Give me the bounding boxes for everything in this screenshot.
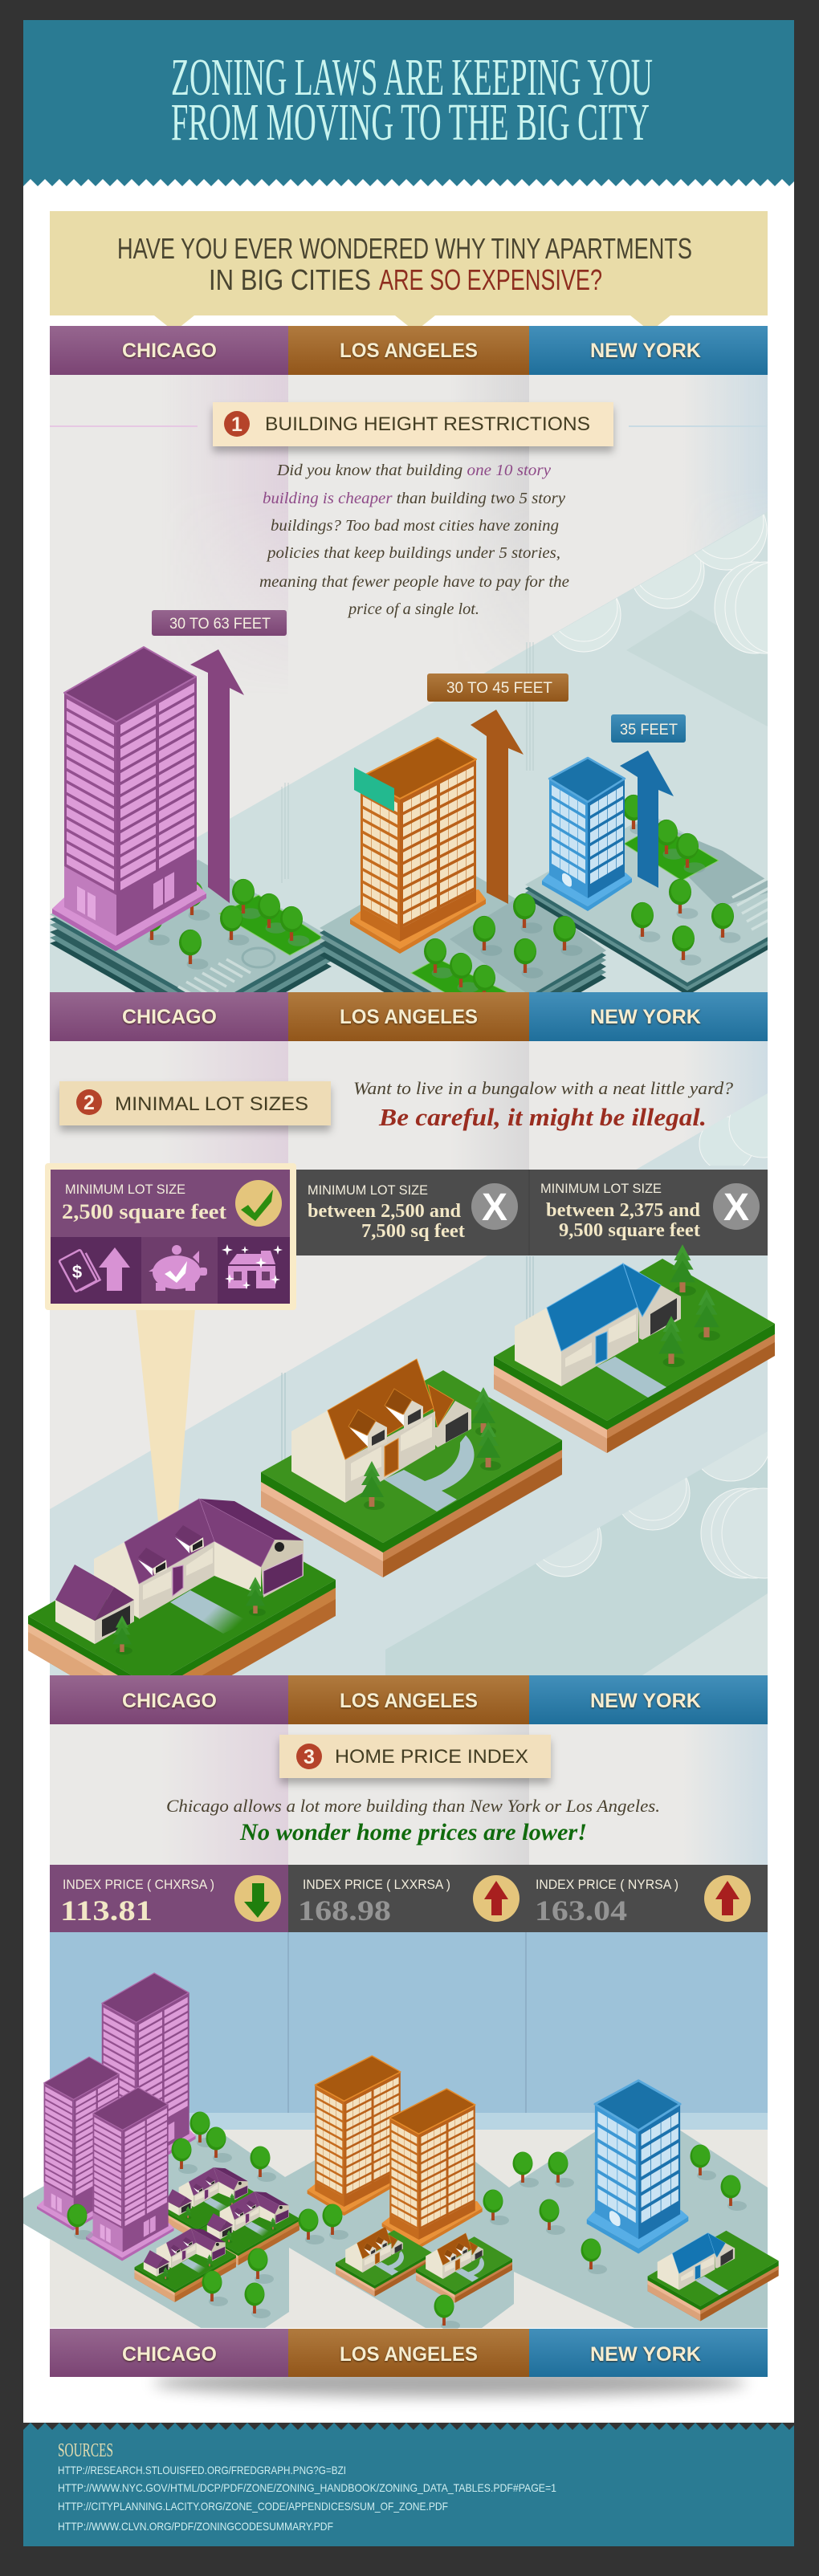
intro paragraph [259,462,569,618]
building: New York tower [542,758,632,911]
icon: NY cross [713,1183,760,1230]
arrow: New York height [620,751,674,888]
tab row 3: NEW YORK [590,1690,701,1712]
index bar [50,1865,768,1932]
intro text: Be careful, it might be illegal. [378,1103,707,1131]
intro paragraph: policies that keep buildings under 5 stories, [266,544,560,562]
tab row 1: NEW YORK [590,340,701,362]
section heading [59,1081,331,1125]
text: NY lot size: MINIMUM LOT SIZE [540,1181,662,1196]
buildings and houses: Chicago [37,1973,299,2318]
pill: New York height [611,714,686,743]
tab row 4: CHICAGO [122,2343,217,2366]
intro paragraph: building is cheaper than building two 5 story [263,490,565,507]
section heading: HOME PRICE INDEX [335,1746,528,1768]
lot: Los Angeles [320,877,606,992]
trees: Los Angeles [424,893,583,992]
tab row 4 [50,2329,768,2377]
header banner [23,20,794,186]
house: Chicago [28,1499,336,1722]
arrow: Los Angeles height [471,710,524,904]
text: LA lot size: 7,500 sq feet [361,1221,465,1242]
tab row 2 [50,992,768,1041]
intro text [166,1796,660,1846]
arrow: Chicago height [190,649,244,903]
intro text [353,1078,733,1131]
pill: New York height: 35 FEET [620,722,678,739]
sources footer [23,2423,794,2546]
icon: sparkling house [222,1244,283,1289]
background diagonal [50,1041,805,1675]
background tints [161,1724,768,1865]
bottom shadow [153,2368,747,2397]
text: LA lot size [308,1182,465,1242]
intro text: Chicago allows a lot more building than New York or Los Angeles. [166,1796,660,1816]
question text: IN BIG CITIES [209,263,371,296]
building: Los Angeles tower [350,738,486,954]
intro paragraph: meaning that fewer people have to pay for the [259,573,569,591]
lot: New York [525,819,768,992]
buildings and houses: Los Angeles [299,2056,512,2330]
intro paragraph: Did you know that building one 10 story [276,462,551,479]
tab row 3: LOS ANGELES [340,1690,478,1712]
tab row 1 [50,326,768,375]
dark bar: LA and NY lot sizes [296,1170,768,1255]
section heading: BUILDING HEIGHT RESTRICTIONS [265,413,590,435]
text: NY lot size: 9,500 square feet [559,1220,700,1241]
index: Chicago: 113.81 [60,1894,153,1927]
icon: money up [59,1247,130,1292]
index: New York [535,1875,751,1927]
panel: home price index [23,1724,779,2330]
section heading [50,402,767,446]
intro text: No wonder home prices are lower! [239,1819,587,1846]
tab row 2: LOS ANGELES [340,1006,478,1028]
pill: Los Angeles height [427,674,568,702]
icon: LA cross: X [482,1186,507,1229]
tab row 2: NEW YORK [590,1006,701,1028]
index: Los Angeles: INDEX PRICE ( LXXRSA ) [303,1877,450,1892]
index: New York: 163.04 [535,1894,627,1927]
pill: Chicago height: 30 TO 63 FEET [169,616,271,633]
section heading: 2 [84,1092,95,1114]
text: NY lot size [540,1181,701,1241]
building: Chicago tower [52,647,206,951]
trees: New York [622,795,740,966]
pill: Los Angeles height: 30 TO 45 FEET [446,680,552,697]
index: Los Angeles: 168.98 [298,1894,391,1927]
main panel background [50,375,768,2328]
text: LA lot size: between 2,500 and [308,1201,462,1222]
sources heading: SOURCES [58,2440,113,2461]
tab row 1: LOS ANGELES [340,340,478,362]
title [171,48,653,152]
source links [58,2464,556,2533]
intro paragraph: price of a single lot. [347,600,479,618]
lot: Chicago [50,860,332,992]
text: NY lot size: between 2,375 and [546,1200,701,1221]
tab row 4: NEW YORK [590,2343,701,2366]
source links: HTTP://WWW.CLVN.ORG/PDF/ZONINGCODESUMMARY.PDF [58,2520,333,2533]
icon: piggy bank [149,1245,207,1291]
index: New York: INDEX PRICE ( NYRSA ) [536,1877,678,1892]
intro paragraph: buildings? Too bad most cities have zoning [271,517,559,535]
card stem [136,1308,195,1521]
trees: Chicago [141,879,309,970]
buildings and houses: New York [512,2081,779,2321]
house: New York [494,1244,775,1453]
source links: HTTP://WWW.NYC.GOV/HTML/DCP/PDF/ZONE/ZONING_HANDBOOK/ZONING_DATA_TABLES.PDF#PAGE=1 [58,2481,556,2494]
section heading: 3 [304,1746,315,1768]
scene: sky and ground [23,1932,768,2328]
tab row 3: CHICAGO [122,1690,217,1712]
question text: ARE SO EXPENSIVE? [379,263,602,296]
source links: HTTP://RESEARCH.STLOUISFED.ORG/FREDGRAPH.PNG?G=BZI [58,2464,346,2476]
icon: NY cross: X [723,1186,749,1229]
question banner [50,211,768,332]
panel: minimal lot sizes [28,1041,775,1675]
icon: LA cross [471,1183,518,1230]
panel: building height restrictions [50,375,768,992]
index: Los Angeles [298,1875,520,1927]
source links: HTTP://CITYPLANNING.LACITY.ORG/ZONE_CODE/APPENDICES/SUM_OF_ZONE.PDF [58,2500,448,2513]
icon: check badge [235,1180,282,1227]
card: Chicago lot size: MINIMUM LOT SIZE [65,1182,185,1197]
tab row 4: LOS ANGELES [340,2343,478,2366]
section heading [279,1735,551,1778]
city lots [50,795,768,992]
tab row 1: CHICAGO [122,340,217,362]
background diagonal [50,375,816,992]
pill: Chicago height [152,610,287,636]
index: Chicago [60,1875,281,1927]
question text [117,232,692,296]
card: Chicago lot size: 2,500 square feet [62,1200,226,1223]
section heading: 1 [231,413,242,436]
tab row 3 [50,1675,768,1724]
intro text: Want to live in a bungalow with a neat little yard? [353,1078,733,1098]
text: LA lot size: MINIMUM LOT SIZE [308,1182,428,1198]
icon: money up: $ [72,1262,82,1282]
section heading: MINIMAL LOT SIZES [115,1093,308,1115]
index: Chicago: INDEX PRICE ( CHXRSA ) [63,1877,214,1892]
card: Chicago lot size [45,1163,296,1310]
house: Los Angeles [261,1359,562,1577]
tab row 2: CHICAGO [122,1006,217,1028]
